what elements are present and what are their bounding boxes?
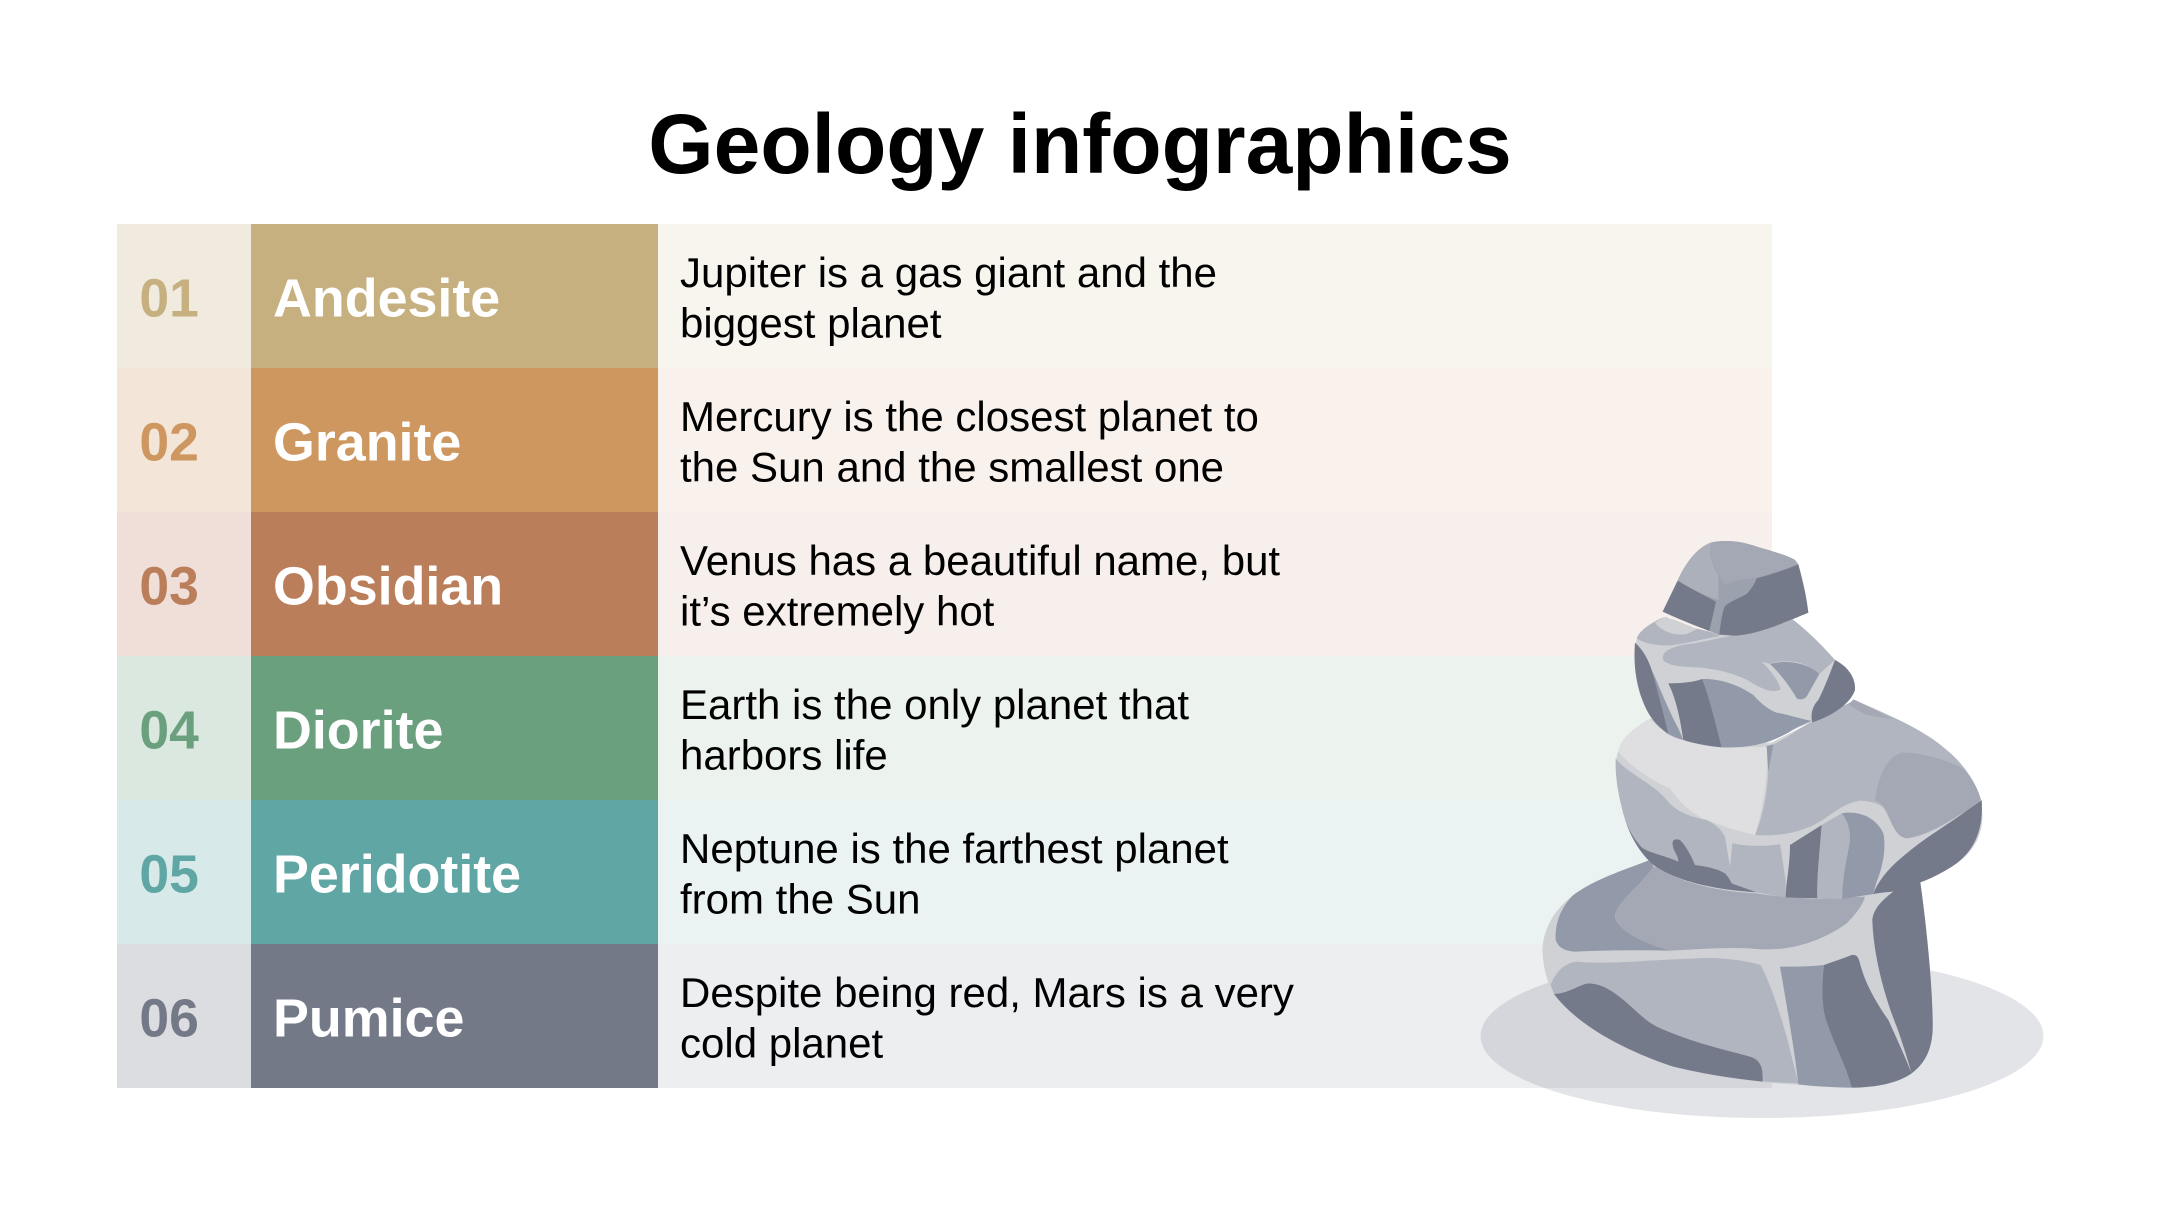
top rock — [1663, 541, 1808, 636]
row 03: Obsidian — [117, 512, 1772, 656]
row 05: Peridotite: Neptune is the farthest planet — [680, 825, 1229, 872]
title: Geology infographics — [648, 97, 1512, 191]
row 02: Granite: Granite — [273, 412, 461, 472]
row 02: Granite: Mercury is the closest planet to — [680, 393, 1259, 440]
illustration: stacked rocks — [1480, 541, 2044, 1118]
row 05: Peridotite — [117, 800, 1772, 944]
row 04: Diorite — [117, 656, 1772, 800]
row 05: Peridotite: Peridotite — [273, 844, 521, 904]
row 04: Diorite: Diorite — [273, 700, 443, 760]
row 01: Andesite: Andesite — [273, 268, 500, 328]
row 01: Andesite: biggest planet — [680, 299, 942, 346]
row 02: Granite: 02 — [139, 414, 199, 472]
row 02: Granite: the Sun and the smallest one — [680, 443, 1224, 490]
row 04: Diorite: 04 — [139, 702, 199, 760]
row 04: Diorite: Earth is the only planet that — [680, 681, 1189, 728]
row 06: Pumice: Pumice — [273, 988, 464, 1048]
row 04: Diorite: harbors life — [680, 731, 888, 778]
row 03: Obsidian: it’s extremely hot — [680, 587, 995, 634]
row 03: Obsidian: Venus has a beautiful name, but — [680, 537, 1280, 584]
upper rock — [1635, 617, 1855, 747]
row 06: Pumice: cold planet — [680, 1019, 883, 1066]
row 02: Granite — [117, 368, 1772, 512]
row 01: Andesite — [117, 224, 1772, 368]
bottom rock — [1542, 860, 1933, 1088]
table of rock types — [117, 224, 1772, 1088]
row 03: Obsidian: 03 — [139, 558, 199, 616]
row 06: Pumice: Despite being red, Mars is a very — [680, 969, 1294, 1016]
middle rock — [1616, 699, 1982, 899]
row 01: Andesite: Jupiter is a gas giant and the — [680, 249, 1217, 296]
row 06: Pumice: 06 — [139, 990, 199, 1048]
row 05: Peridotite: from the Sun — [680, 875, 920, 922]
row 05: Peridotite: 05 — [139, 846, 199, 904]
row 06: Pumice — [117, 944, 1772, 1088]
ground shadow — [1480, 954, 2044, 1118]
row 03: Obsidian: Obsidian — [273, 556, 503, 616]
row 01: Andesite: 01 — [139, 270, 199, 328]
